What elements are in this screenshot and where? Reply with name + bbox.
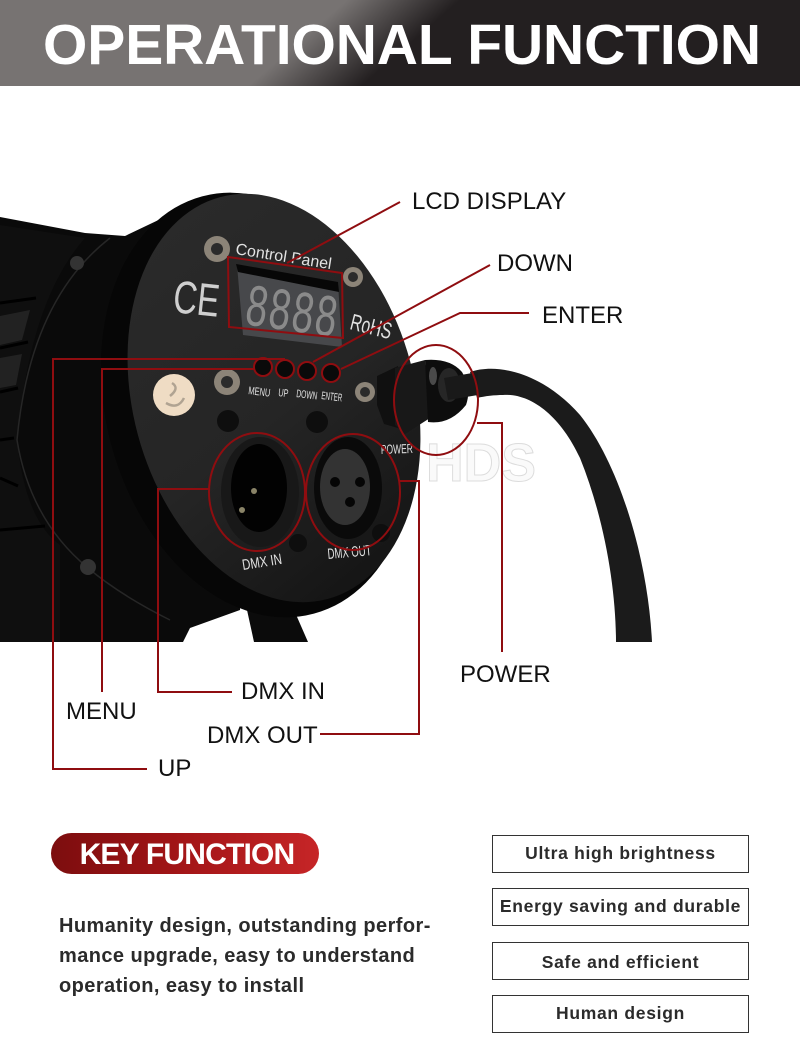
control panel labels: ENTER (321, 390, 343, 405)
feature box: energy saving: Energy saving and durable (500, 896, 741, 916)
callout labels: DMX IN (241, 678, 325, 705)
callout labels: POWER (460, 661, 551, 688)
callout lines (53, 202, 529, 769)
control panel labels: Control Panel (234, 241, 333, 273)
panel screws (204, 236, 390, 552)
control panel labels: DOWN (296, 388, 318, 403)
feature box: human design (492, 995, 749, 1033)
feature box: safety: Safe and efficient (542, 952, 699, 972)
callout labels: MENU (66, 698, 137, 725)
LCD display: 8888 (240, 275, 342, 356)
description paragraph: Humanity design, outstanding perfor- (59, 915, 431, 937)
description paragraph (59, 915, 431, 997)
feature box: brightness (492, 835, 749, 873)
key function badge: KEY FUNCTION (80, 838, 294, 871)
callout labels: DOWN (497, 250, 573, 277)
control panel labels: RoHS (348, 309, 395, 344)
key function badge (51, 833, 319, 874)
callout labels (66, 188, 623, 782)
control panel labels (171, 241, 413, 574)
light fixture body (0, 192, 420, 642)
control panel labels: DMX IN (241, 551, 283, 574)
feature box: human design: Human design (556, 1003, 685, 1023)
control panel labels: CE (171, 270, 222, 327)
control panel labels: MENU (248, 385, 271, 400)
stand leg (247, 610, 308, 642)
cable gland (377, 360, 478, 434)
power cable (470, 369, 652, 642)
sticker (153, 374, 195, 416)
watermark: HDS (426, 433, 536, 493)
feature box: energy saving (492, 888, 749, 926)
callout labels: UP (158, 755, 191, 782)
DMX OUT connector (314, 437, 382, 539)
callout labels: DMX OUT (207, 722, 318, 749)
title banner: OPERATIONAL FUNCTION (43, 13, 761, 77)
control panel labels: DMX OUT (327, 542, 372, 563)
feature box: brightness: Ultra high brightness (525, 843, 716, 863)
description paragraph: mance upgrade, easy to understand (59, 945, 415, 967)
callout labels: LCD DISPLAY (412, 188, 566, 215)
description paragraph: operation, easy to install (59, 975, 304, 997)
title banner (0, 0, 800, 86)
LCD display (236, 264, 342, 356)
control panel labels: UP (278, 387, 289, 400)
feature box: safety (492, 942, 749, 980)
DMX IN connector (221, 437, 299, 547)
product photo: light fixture with callouts (0, 192, 652, 776)
control buttons (254, 358, 340, 382)
callout labels: ENTER (542, 302, 623, 329)
control panel labels: POWER (381, 441, 413, 457)
